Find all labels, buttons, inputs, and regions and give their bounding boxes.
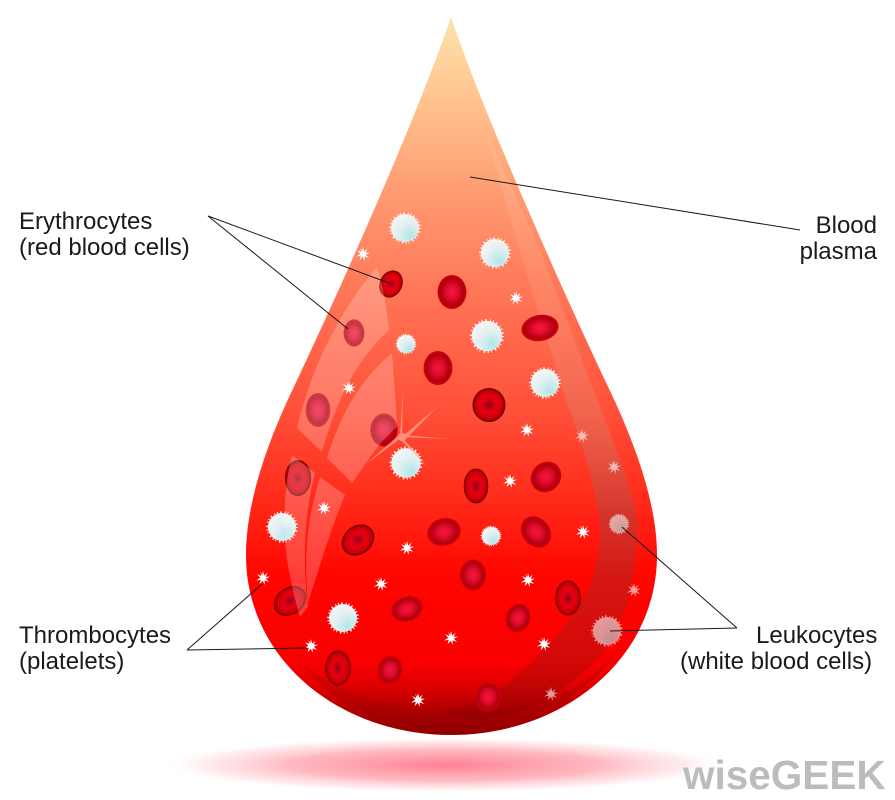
label: blood plasma: plasma [800, 238, 878, 265]
label: blood plasma: Blood [816, 212, 877, 239]
label: thrombocytes: Thrombocytes [19, 622, 171, 649]
label: thrombocytes [19, 622, 171, 675]
label: thrombocytes: (platelets) [19, 648, 124, 675]
leader lines [187, 177, 800, 650]
bottom dark crescent [300, 640, 625, 733]
label: leukocytes: Leukocytes [756, 622, 877, 649]
label: erythrocytes: Erythrocytes [19, 208, 152, 235]
platelets [256, 247, 641, 707]
right side translucent band [440, 133, 637, 720]
label: blood plasma [800, 212, 878, 265]
drop shadow [160, 737, 730, 793]
label: leukocytes [680, 622, 877, 675]
label: erythrocytes [19, 208, 190, 261]
white blood cells [267, 213, 629, 646]
label: erythrocytes: (red blood cells) [19, 234, 190, 261]
blood drop body [246, 17, 657, 735]
red blood cells [269, 267, 580, 714]
glass highlights on drop [284, 267, 397, 617]
label: leukocytes: (white blood cells) [680, 648, 872, 675]
watermark: wiseGEEK: wiseGEEK [682, 752, 886, 798]
sparkle burst [365, 390, 449, 470]
